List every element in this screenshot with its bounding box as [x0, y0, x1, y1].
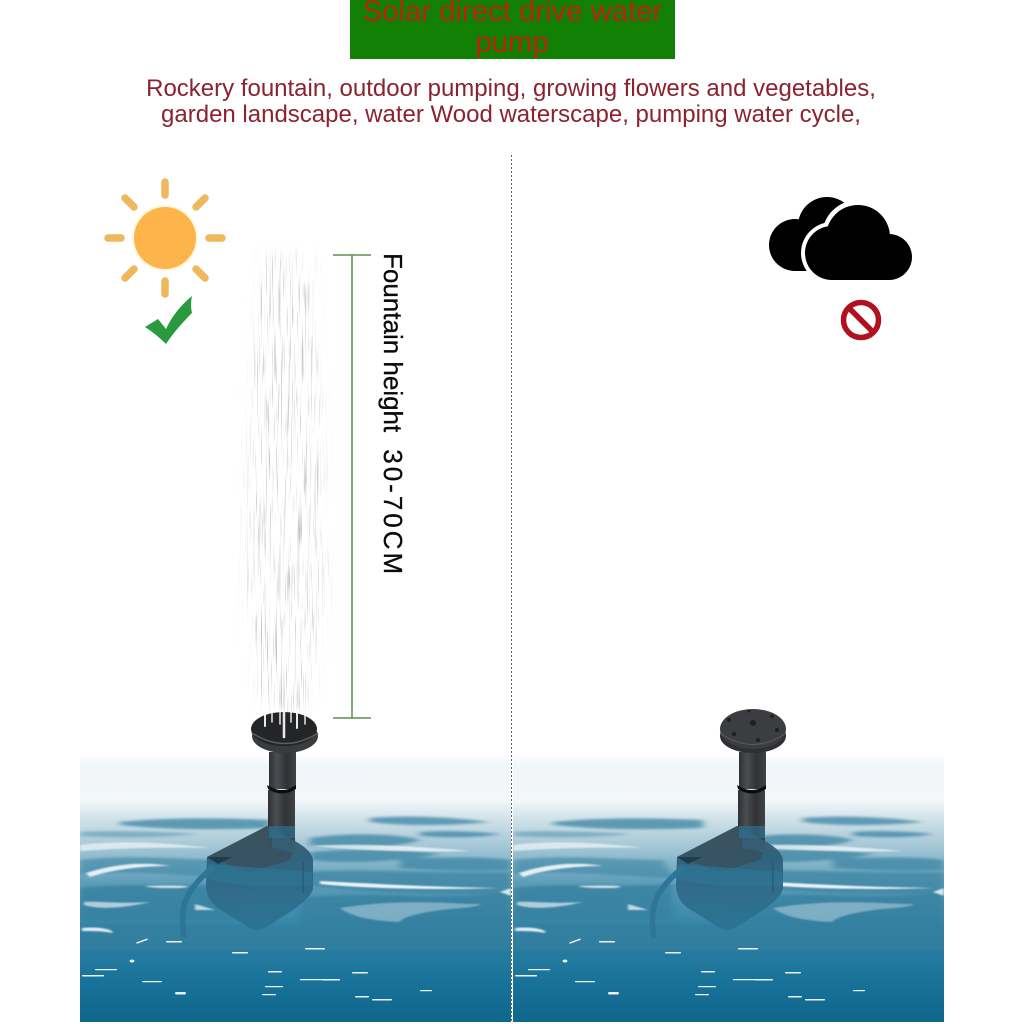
subtitle text: Rockery fountain, outdoor pumping, growing flowers and vegetables,	[146, 75, 876, 102]
water panel: right	[513, 755, 944, 1022]
fountain height bracket	[333, 255, 371, 718]
pump: left, under water	[182, 752, 313, 938]
title banner: pump	[475, 26, 549, 59]
icon: green check mark	[145, 296, 192, 344]
fountain nozzle head: left, spraying	[251, 712, 318, 753]
fountain height label: Fountain height 30-70CM	[378, 253, 408, 577]
icon: sun	[108, 182, 222, 294]
subtitle text: garden landscape, water Wood waterscape, pumping water cycle,	[161, 101, 861, 128]
icon: prohibited sign	[844, 302, 878, 338]
pump: right, under water	[652, 752, 783, 938]
centre dotted divider	[510, 155, 512, 1022]
subtitle text	[146, 75, 876, 128]
icon: black clouds	[769, 197, 912, 284]
fountain nozzle head: right, idle	[720, 709, 786, 753]
water panel: left	[80, 755, 511, 1022]
title banner	[350, 0, 675, 59]
fountain water spray	[240, 249, 332, 714]
